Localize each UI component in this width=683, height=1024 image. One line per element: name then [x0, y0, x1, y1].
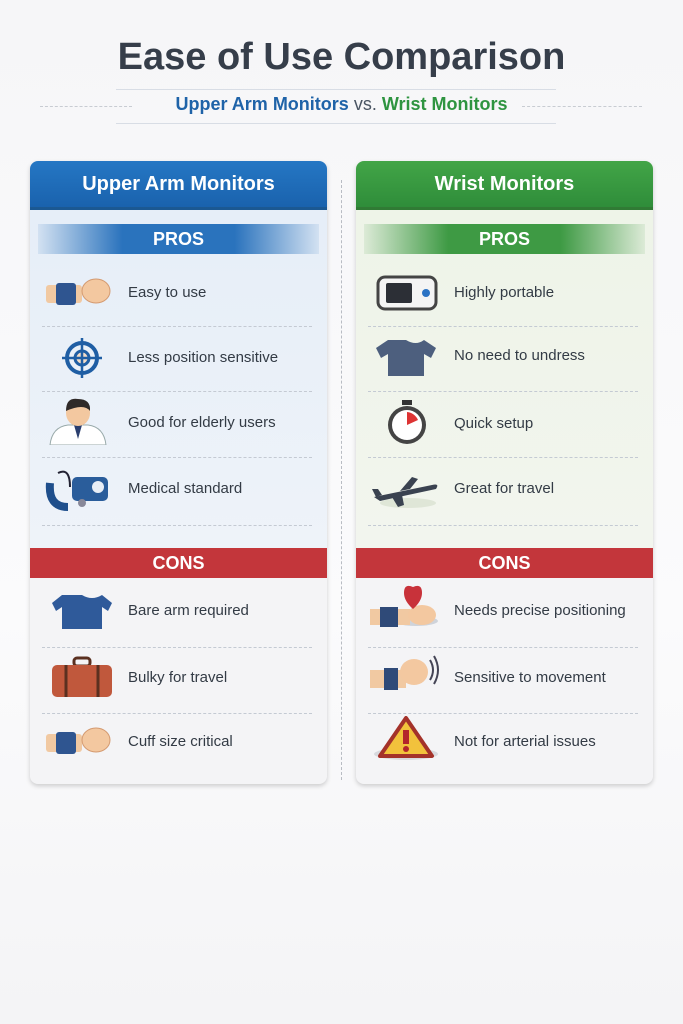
cons header — [30, 548, 327, 578]
header: wrist: Wrist Monitors — [435, 173, 574, 195]
cons header — [356, 548, 653, 578]
pro: travel: Great for travel — [454, 480, 554, 497]
header: upper arm — [30, 161, 327, 210]
pro: easy to use: Easy to use — [128, 284, 206, 301]
pro: no undress — [376, 340, 585, 376]
con: arterial: Not for arterial issues — [454, 733, 596, 750]
panel: upper arm monitors — [30, 161, 327, 784]
pro: no undress: No need to undress — [454, 347, 585, 364]
con: bulky: Bulky for travel — [128, 669, 227, 686]
pros band: PROS — [153, 229, 204, 249]
pro: quick setup — [388, 400, 533, 444]
pro: medical standard — [46, 470, 242, 511]
con: movement — [370, 656, 606, 690]
pros band — [364, 224, 645, 254]
center divider — [341, 180, 342, 780]
pro: good for elderly — [50, 398, 276, 445]
con: cuff size — [46, 728, 233, 754]
pro: portable: Highly portable — [454, 284, 554, 301]
con: bulky — [52, 656, 227, 697]
pro: quick setup: Quick setup — [454, 415, 533, 432]
pro: easy to use — [46, 278, 206, 305]
header: upper arm: Upper Arm Monitors — [82, 173, 275, 195]
pros band — [38, 224, 319, 254]
pro: less position sensitive — [62, 338, 278, 378]
pro: medical standard: Medical standard — [128, 480, 242, 497]
subtitle: Upper Arm Monitors vs. Wrist Monitors — [175, 94, 508, 114]
header: wrist — [356, 161, 653, 210]
cons header: CONS — [152, 553, 204, 573]
title: Ease of Use Comparison — [118, 36, 565, 78]
panel: wrist monitors — [356, 161, 653, 784]
con: precise positioning: Needs precise positioning — [454, 602, 626, 619]
con: bare arm — [52, 595, 249, 629]
con: arterial — [374, 716, 596, 760]
cons header: CONS — [478, 553, 530, 573]
con: bare arm: Bare arm required — [128, 602, 249, 619]
pro: travel — [372, 477, 554, 508]
con: precise positioning — [370, 586, 626, 627]
pro: less position sensitive: Less position sensitive — [128, 349, 278, 366]
pro: good for elderly: Good for elderly users — [128, 414, 276, 431]
pros band: PROS — [479, 229, 530, 249]
con: movement: Sensitive to movement — [454, 669, 606, 686]
pro: portable — [376, 276, 554, 310]
con: cuff size: Cuff size critical — [128, 733, 233, 750]
